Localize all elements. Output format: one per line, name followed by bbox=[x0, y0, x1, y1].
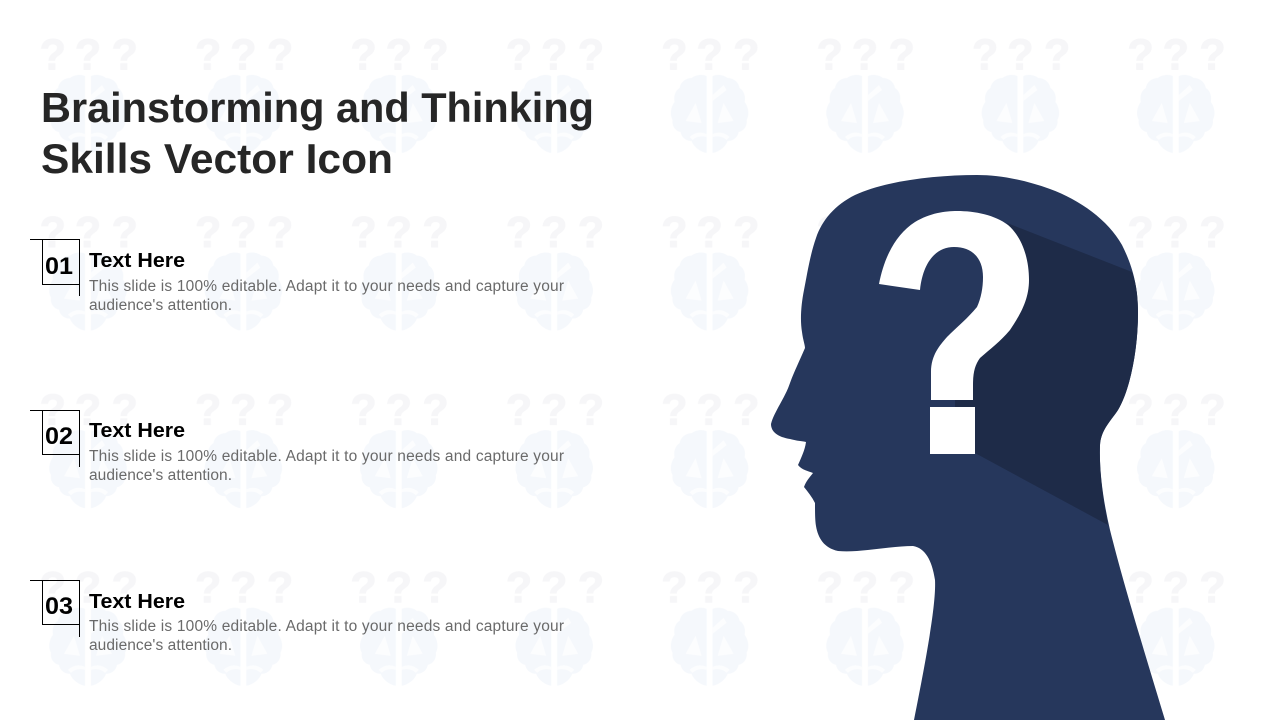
item heading 02: Text Here bbox=[89, 420, 185, 442]
item body 01 bbox=[89, 278, 564, 314]
item body 03: This slide is 100% editable. Adapt it to your needs and capture your bbox=[89, 618, 564, 635]
item 02 bbox=[30, 410, 564, 484]
icon: head silhouette with question mark bbox=[771, 175, 1165, 720]
cast shadow bbox=[955, 223, 1138, 525]
item body 02: audience's attention. bbox=[89, 467, 232, 484]
number badge 02: 02 bbox=[45, 423, 73, 450]
item heading 03: Text Here bbox=[89, 591, 185, 613]
number badge 01: 01 bbox=[45, 253, 73, 280]
title: Brainstorming and Thinking bbox=[41, 84, 594, 131]
number badge 02 bbox=[30, 410, 80, 467]
number badge 03: 03 bbox=[45, 593, 73, 620]
question mark bbox=[879, 211, 1029, 454]
item body 01: audience's attention. bbox=[89, 297, 232, 314]
title: Skills Vector Icon bbox=[41, 135, 393, 182]
item body 03: audience's attention. bbox=[89, 637, 232, 654]
item 03 bbox=[30, 580, 564, 654]
item heading 01: Text Here bbox=[89, 250, 185, 272]
item 01 bbox=[30, 240, 564, 314]
item body 01: This slide is 100% editable. Adapt it to your needs and capture your bbox=[89, 278, 564, 295]
item body 02 bbox=[89, 448, 564, 484]
question mark hook bbox=[879, 211, 1029, 400]
head silhouette bbox=[771, 175, 1165, 720]
item body 03 bbox=[89, 618, 564, 654]
item body 02: This slide is 100% editable. Adapt it to your needs and capture your bbox=[89, 448, 564, 465]
number badge 01 bbox=[30, 240, 80, 296]
number badge 03 bbox=[30, 580, 80, 637]
question mark dot bbox=[930, 407, 975, 454]
title bbox=[41, 84, 594, 182]
